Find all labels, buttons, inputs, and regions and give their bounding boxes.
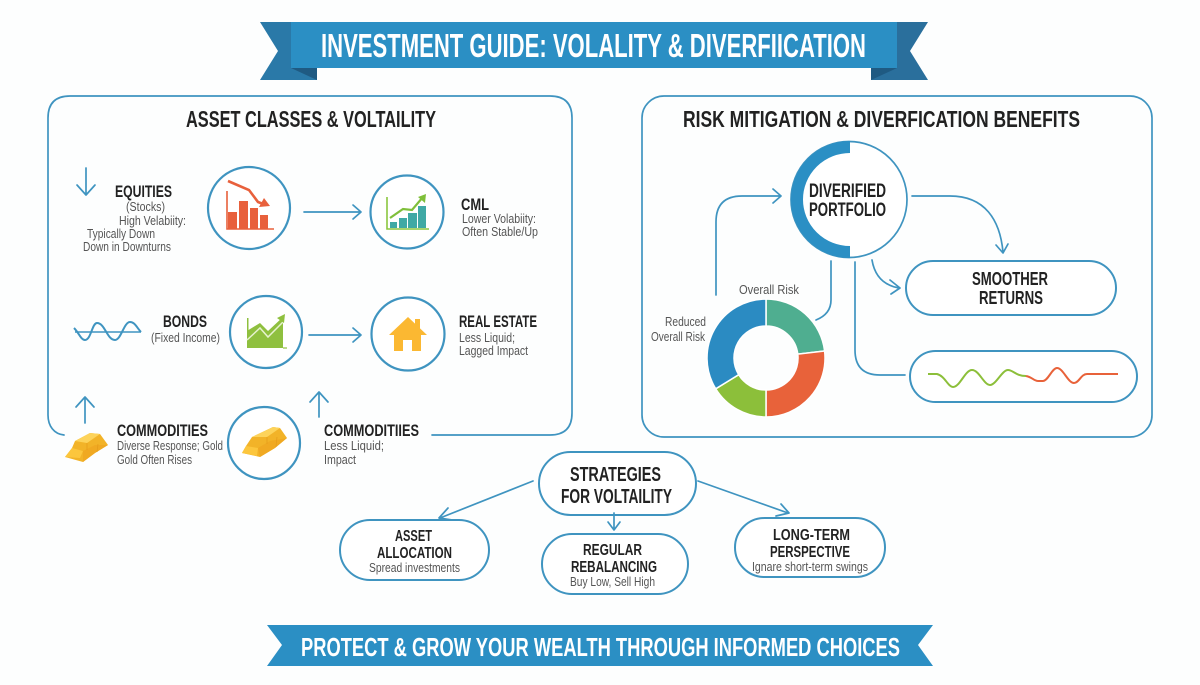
diversified portfolio circle: PORTFOLIO [809,200,886,221]
arrow: to regular rebalancing [608,513,620,530]
title banner [260,22,928,80]
pill: strategies for volatility [539,452,696,515]
pill: long-term perspective: LONG-TERM [773,527,850,544]
footer banner [267,625,933,666]
pill: long-term perspective: Ignare short-term swings [752,560,868,574]
pill: long-term perspective: PERSPECTIVE [770,544,850,561]
arrow: to asset allocation [439,481,533,520]
text: commodities left: Diverse Response; Gold [117,439,223,453]
icon: falling bar chart [208,167,290,249]
text: commodities left: COMMODITIES [117,421,208,440]
panel outline: asset classes [48,96,572,435]
icon: down arrow [77,168,95,195]
text: commodities right: Less Liquid; [324,439,384,453]
donut chart [707,299,825,417]
text: cml [461,195,538,239]
icon: gold bars left [65,433,108,462]
text: bonds [151,313,220,345]
arrow: up left [76,397,94,423]
diversified portfolio circle: DIVERIFIED [809,181,886,202]
panel: risk mitigation and diversification [642,96,1152,437]
pill: smoother returns [906,261,1116,315]
text: commodities right [324,421,419,467]
arrow: to long-term perspective [698,481,789,516]
text: equities: Down in Downturns [83,240,171,254]
text: equities [83,182,186,254]
text: real estate: Less Liquid; [459,331,515,345]
icon: wave [74,322,141,340]
icon: gold bars in circle [228,407,300,479]
pill: smoother returns: RETURNS [979,288,1043,308]
text: cml: CML [461,195,489,214]
donut label: reduced overall risk: Reduced [665,315,706,329]
text: equities: High Velabiity: [119,214,186,228]
pill: smoother returns: SMOOTHER [972,269,1048,289]
text: real estate: REAL ESTATE [459,312,537,331]
text: cml: Often Stable/Up [462,225,538,239]
heading: risk mitigation: RISK MITIGATION & DIVERFICATION BENEFITS [683,106,1080,132]
arrow: equities to cml [304,205,361,219]
footer banner: PROTECT & GROW YOUR WEALTH THROUGH INFORMED CHOICES [301,632,900,662]
text: equities: (Stocks) [126,200,165,214]
donut label: overall risk: Overall Risk [739,283,800,297]
pill: regular rebalancing: Buy Low, Sell High [570,575,655,589]
pill: return line chart [910,351,1137,402]
pill: regular rebalancing [542,534,688,594]
arrow: bonds to real estate [309,328,361,342]
panel: asset classes and volatility [48,96,572,479]
donut label: reduced overall risk: Overall Risk [651,330,706,344]
pill: asset allocation: ALLOCATION [377,545,452,562]
text: equities: Typically Down [87,227,155,241]
pill: asset allocation [340,520,489,580]
text: real estate [459,312,537,358]
text: commodities left: Gold Often Rises [117,453,192,467]
strategies section [340,452,885,594]
title banner: INVESTMENT GUIDE: VOLALITY & DIVERFIICATION [321,27,866,64]
pill: strategies for volatility: FOR VOLTAILITY [561,486,672,508]
heading: asset classes: ASSET CLASSES & VOLTAILITY [186,106,436,132]
panel outline: risk mitigation [642,96,1152,437]
text: commodities left [117,421,223,467]
text: bonds: BONDS [163,313,207,331]
text: bonds: (Fixed Income) [151,331,220,345]
text: commodities right: COMMODITIIES [324,421,419,440]
pill: asset allocation: ASSET [395,528,432,545]
pill: long-term perspective [735,518,885,577]
text: cml: Lower Volabiity: [462,212,536,226]
pill: asset allocation: Spread investments [369,561,460,575]
connectors [716,189,1008,375]
text: equities: EQUITIES [115,182,172,201]
pill: regular rebalancing: REGULAR [583,542,642,559]
icon: green area chart [230,296,302,368]
pill: strategies for volatility: STRATEGIES [570,464,661,486]
text: commodities right: Impact [324,453,356,467]
arrow: up right [310,392,328,417]
icon: house [372,298,444,370]
pill: regular rebalancing: REBALANCING [571,559,657,576]
icon: rising bar chart [370,176,444,248]
diversified portfolio circle [791,142,907,258]
donut label: reduced overall risk [651,315,706,344]
text: real estate: Lagged Impact [459,344,528,358]
